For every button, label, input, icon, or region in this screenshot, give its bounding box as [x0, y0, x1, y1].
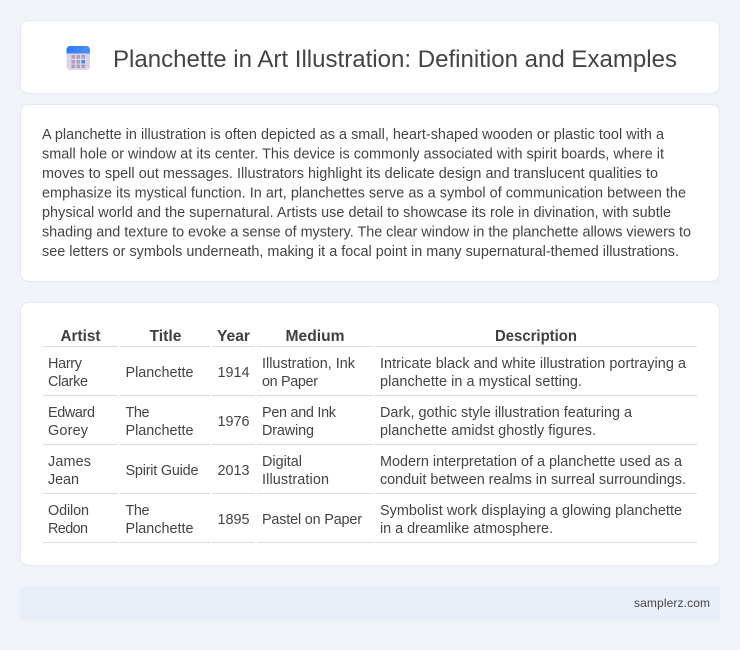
text block: definition paragraph: moves to spell out messages. Illustrators highlight its delicate design and translucent qualities to: [42, 166, 658, 182]
panel: artworks table: [20, 302, 720, 566]
table row: James Jean: Spirit Guide: [126, 463, 198, 479]
table row: Odilon Redon: 1895: [218, 512, 250, 528]
table row: Harry Clarke: planchette in a mystical setting.: [380, 374, 582, 390]
table row: James Jean: James: [48, 454, 91, 470]
table header: Title: [150, 328, 182, 345]
table header: Description: [495, 328, 577, 345]
table row: Harry Clarke: Illustration, Ink: [262, 356, 356, 372]
text block: definition paragraph: see letters or symbols underneath, making it a focal point in many supernatural-themed illustrations.: [42, 244, 679, 260]
table row: Odilon Redon: Pastel on Paper: [262, 512, 362, 528]
table row: Harry Clarke: on Paper: [262, 374, 318, 390]
table row: Edward Gorey: planchette amidst ghostly figures.: [380, 423, 596, 439]
table row: James Jean: Modern interpretation of a planchette used as a: [380, 454, 682, 470]
table row: Odilon Redon: Odilon: [48, 503, 89, 519]
text block: definition paragraph: emphasize its mystical function. In art, planchettes serve as a symbol of communication between the: [42, 186, 686, 202]
table row: Odilon Redon: The: [126, 503, 150, 519]
title: Planchette in Art Illustration: Definition and Examples: [113, 46, 677, 73]
table row: Edward Gorey: Dark, gothic style illustration featuring a: [380, 405, 632, 421]
table row: James Jean: Digital: [262, 454, 302, 470]
table header: [60, 328, 577, 345]
table header: Year: [217, 328, 250, 345]
table row: Edward Gorey: The: [126, 405, 150, 421]
table row: James Jean: Jean: [48, 472, 79, 488]
table row: Harry Clarke: Planchette: [126, 365, 194, 381]
table row: James Jean: Illustration: [262, 472, 329, 488]
table row: James Jean: 2013: [218, 463, 250, 479]
table row: Edward Gorey: Planchette: [126, 423, 194, 439]
table row: Edward Gorey: Gorey: [48, 423, 89, 439]
table row: Edward Gorey: Pen and Ink: [262, 405, 337, 421]
table header: Medium: [286, 328, 344, 345]
icon: calendar: [66, 46, 90, 70]
table row: Edward Gorey: Drawing: [262, 423, 314, 439]
table row: Odilon Redon: Planchette: [126, 521, 194, 537]
table row: Harry Clarke: [48, 356, 686, 390]
text block: definition paragraph: physical world and the supernatural. Artists use detail to showcase its role in divination, with subtle: [42, 205, 671, 221]
panel: title header: [20, 20, 720, 94]
table row: James Jean: conduit between realms in surreal surroundings.: [380, 472, 686, 488]
table row: Edward Gorey: [48, 405, 632, 439]
table row: Harry Clarke: Harry: [48, 356, 83, 372]
table row: Harry Clarke: 1914: [218, 365, 250, 381]
table row: Odilon Redon: in a dreamlike atmosphere.: [380, 521, 553, 537]
text block: definition paragraph: [42, 127, 691, 260]
text block: definition paragraph: shading and texture to evoke a sense of mystery. The clear window in the planchette allows viewers to: [42, 224, 691, 240]
table row: James Jean: [48, 454, 686, 488]
table header: Artist: [60, 328, 101, 345]
text block: definition paragraph: small hole or window at its center. This device is commonly associated with spirit boards, where it: [42, 146, 664, 162]
table row: Edward Gorey: Edward: [48, 405, 95, 421]
table row: Odilon Redon: Symbolist work displaying a glowing planchette: [380, 503, 682, 519]
table row: Edward Gorey: 1976: [218, 414, 250, 430]
footer: [20, 586, 720, 620]
table row: Odilon Redon: [48, 503, 682, 537]
footer source text: samplerz.com: [634, 596, 710, 610]
text block: definition paragraph: A planchette in illustration is often depicted as a small, heart-shaped wooden or plastic tool with a: [42, 127, 664, 143]
table row: Odilon Redon: Redon: [48, 521, 88, 537]
table row: Harry Clarke: Intricate black and white illustration portraying a: [380, 356, 686, 372]
panel: introduction: [20, 104, 720, 282]
table rules: [43, 346, 697, 542]
table row: Harry Clarke: Clarke: [48, 374, 88, 390]
